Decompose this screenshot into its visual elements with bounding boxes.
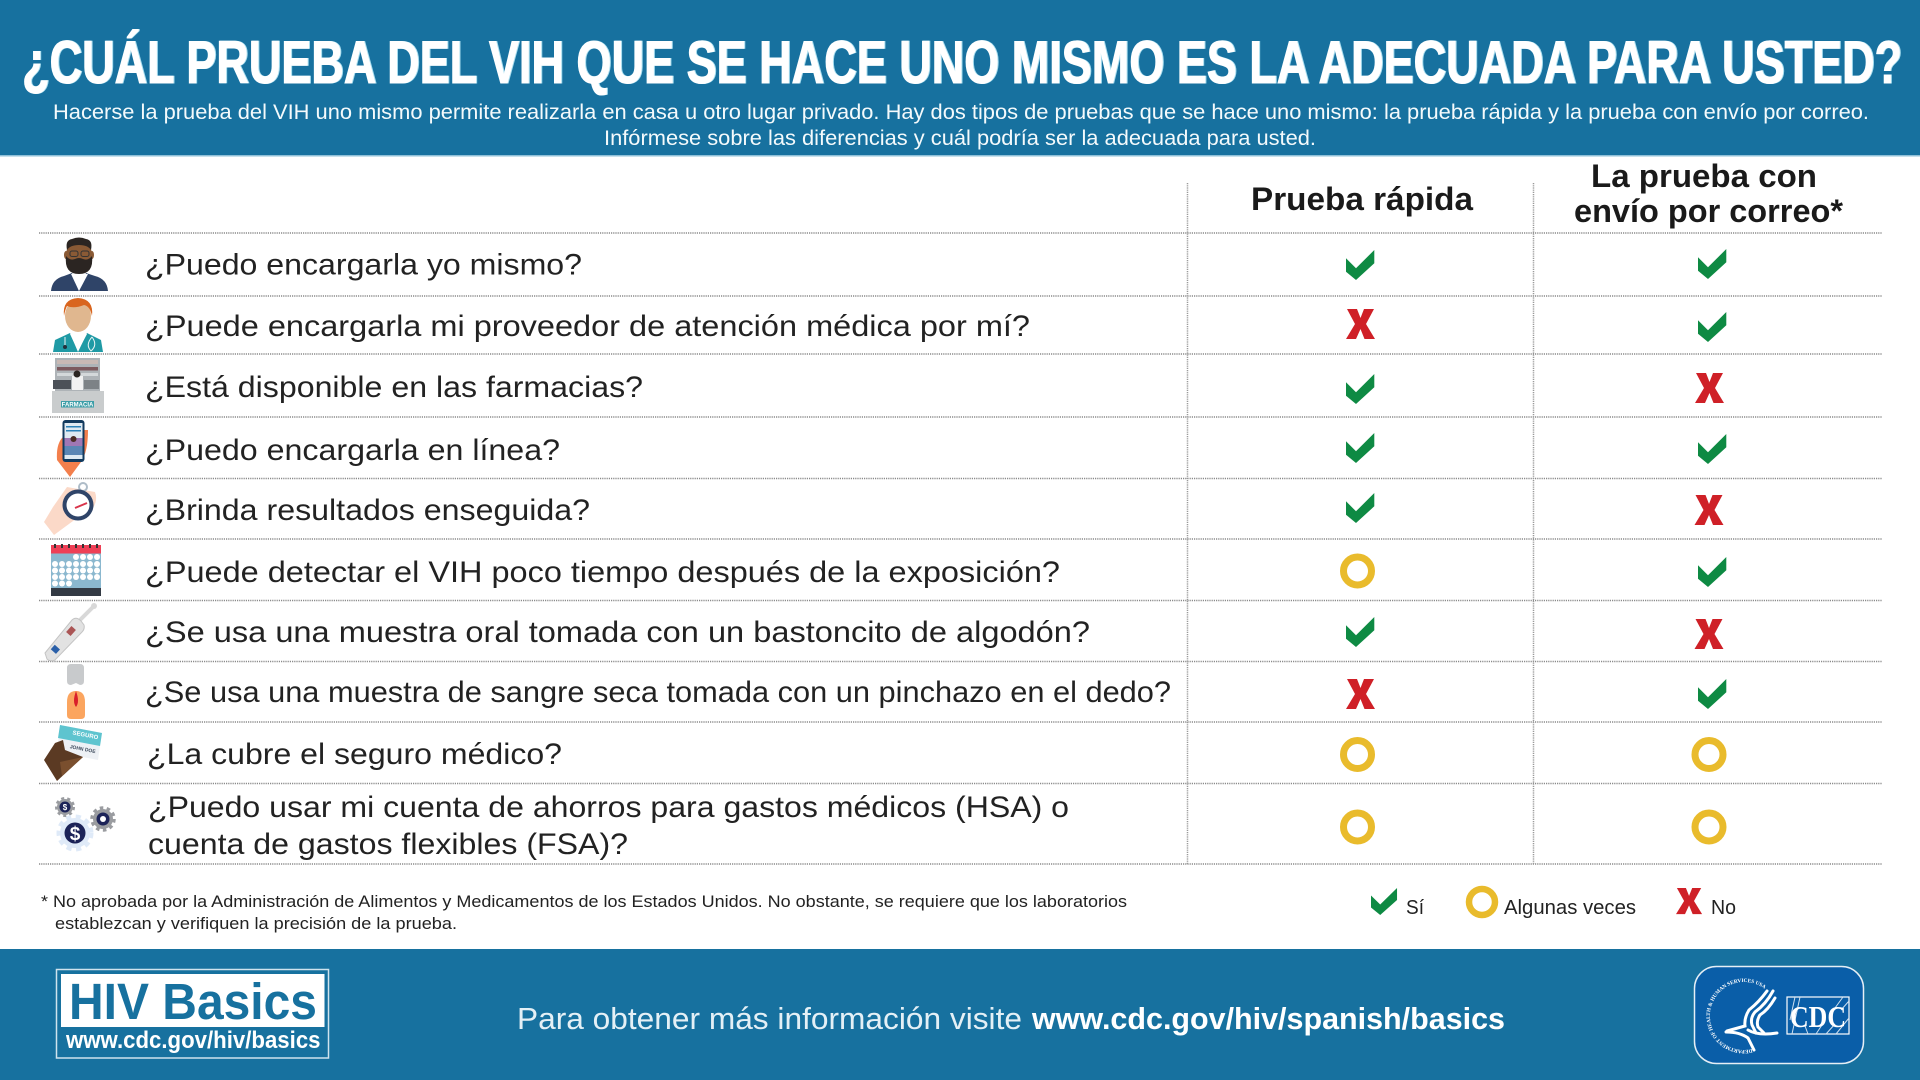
column heading: La prueba con envío por correo: envío por correo* xyxy=(1574,193,1844,229)
legend xyxy=(1371,888,1736,919)
footnote: establezcan y verifiquen la precisión de la prueba. xyxy=(55,914,457,933)
call to action: www.cdc.gov/hiv/spanish/basics xyxy=(1031,1001,1505,1036)
icon: stopwatch in hand xyxy=(44,483,96,535)
intro text: Hacerse la prueba del VIH uno mismo permite realizarla en casa u otro lugar privado. Hay dos tipos de pruebas que se hace uno mismo: la prueba rápida y la prueba con envío por correo. xyxy=(53,101,1869,124)
question: ¿Puede encargarla mi proveedor de atención médica por mí? xyxy=(145,310,1030,343)
question: ¿Puedo usar mi cuenta de ahorros para gastos médicos (HSA) o xyxy=(148,791,1069,824)
row 6: detect soon after exposure xyxy=(51,544,1726,596)
mark: yes xyxy=(1698,557,1726,587)
row 4: order online xyxy=(57,420,1726,477)
icon: calendar xyxy=(51,544,101,596)
question: ¿Puede detectar el VIH poco tiempo después de la exposición? xyxy=(145,556,1060,589)
call to action: Para obtener más información visite xyxy=(517,1001,1022,1036)
question: ¿Puedo encargarla yo mismo? xyxy=(145,248,582,282)
panel: header banner xyxy=(0,0,1920,156)
icon: man with beard xyxy=(51,238,108,291)
logo: HIV Basics xyxy=(56,970,328,1058)
question: ¿La cubre el seguro médico? xyxy=(147,738,562,771)
row 1: order it myself xyxy=(51,238,1726,291)
mark: sometimes xyxy=(1695,813,1723,841)
question: ¿Brinda resultados enseguida? xyxy=(145,494,590,527)
mark: yes xyxy=(1346,433,1374,463)
mark: no xyxy=(1695,373,1724,403)
HHS seal: DEPARTMENT OF HEALTH & HUMAN SERVICES USA xyxy=(1706,978,1766,1054)
CDC mark: CDC xyxy=(1790,999,1846,1034)
column heading: La prueba con envío por correo xyxy=(1574,158,1844,229)
mark: sometimes xyxy=(1344,740,1372,768)
icon: insurance card in hand: SEGURO xyxy=(72,730,99,741)
panel: footer banner xyxy=(0,949,1920,1080)
mark: yes xyxy=(1346,250,1374,280)
mark: yes xyxy=(1346,374,1374,404)
mark: sometimes xyxy=(1344,557,1372,585)
question: ¿Se usa una muestra oral tomada con un bastoncito de algodón? xyxy=(145,616,1090,649)
intro text: Infórmese sobre las diferencias y cuál podría ser la adecuada para usted. xyxy=(604,127,1316,150)
logo: HIV Basics: www.cdc.gov/hiv/basics xyxy=(65,1027,320,1054)
mark: yes xyxy=(1698,679,1726,709)
row 8: dried blood sample xyxy=(67,664,1726,719)
icon: insurance card in hand xyxy=(44,725,102,781)
row 2: provider orders xyxy=(53,298,1726,352)
icon: insurance card in hand: JOHN DOE xyxy=(69,744,97,755)
mark: sometimes xyxy=(1695,740,1723,768)
icon: health care provider xyxy=(53,298,103,352)
icon: pharmacy counter: FARMACIA xyxy=(62,402,94,408)
question xyxy=(148,791,1069,861)
icon: finger prick xyxy=(67,664,85,719)
footnote xyxy=(41,892,1127,933)
column heading: La prueba con envío por correo: La prueba con xyxy=(1591,158,1817,194)
mark: yes xyxy=(1346,493,1374,523)
logo: HHS and CDC xyxy=(1694,966,1864,1064)
mark: no xyxy=(1346,309,1375,339)
legend item: yes: Sí xyxy=(1406,897,1424,919)
footnote: * No aprobada por la Administración de Alimentos y Medicamentos de los Estados Unidos. No obstante, se requiere que los laboratorios xyxy=(41,892,1127,911)
mark: no xyxy=(1694,495,1724,525)
mark: yes xyxy=(1698,434,1726,464)
legend item: no: No xyxy=(1711,897,1736,919)
legend item: sometimes xyxy=(1469,889,1636,919)
icon: gears with dollar signs: $ xyxy=(70,824,81,845)
row 3: pharmacies xyxy=(52,358,1724,413)
mark: yes xyxy=(1698,312,1726,342)
legend item: sometimes: Algunas veces xyxy=(1504,897,1636,919)
question: ¿Puedo encargarla en línea? xyxy=(145,434,560,467)
column heading: Prueba rápida: Prueba rápida xyxy=(1251,181,1473,217)
question: ¿Se usa una muestra de sangre seca tomada con un pinchazo en el dedo? xyxy=(145,676,1171,709)
mark: yes xyxy=(1346,617,1374,647)
question: cuenta de gastos flexibles (FSA)? xyxy=(148,828,628,861)
row 9: insurance xyxy=(44,725,1723,781)
mark: yes xyxy=(1698,249,1726,279)
mark: no xyxy=(1694,619,1724,649)
mark: sometimes xyxy=(1344,813,1372,841)
icon: oral swab test xyxy=(45,603,97,661)
row 7: oral sample xyxy=(45,603,1724,661)
icon: gears with dollar signs xyxy=(56,798,114,849)
row 5: immediate results xyxy=(44,483,1724,535)
mark: no xyxy=(1346,679,1375,709)
icon: pharmacy counter xyxy=(52,358,104,413)
intro text xyxy=(53,101,1869,150)
icon: gears with dollar signs: $ xyxy=(63,803,68,812)
call to action xyxy=(517,1001,1505,1036)
question: ¿Está disponible en las farmacias? xyxy=(145,371,643,404)
row 10: HSA / FSA xyxy=(56,791,1723,861)
logo: HIV Basics: HIV Basics xyxy=(69,973,317,1030)
legend item: no xyxy=(1676,888,1736,919)
icon: phone in hand xyxy=(57,420,88,477)
legend item: yes xyxy=(1371,888,1424,919)
